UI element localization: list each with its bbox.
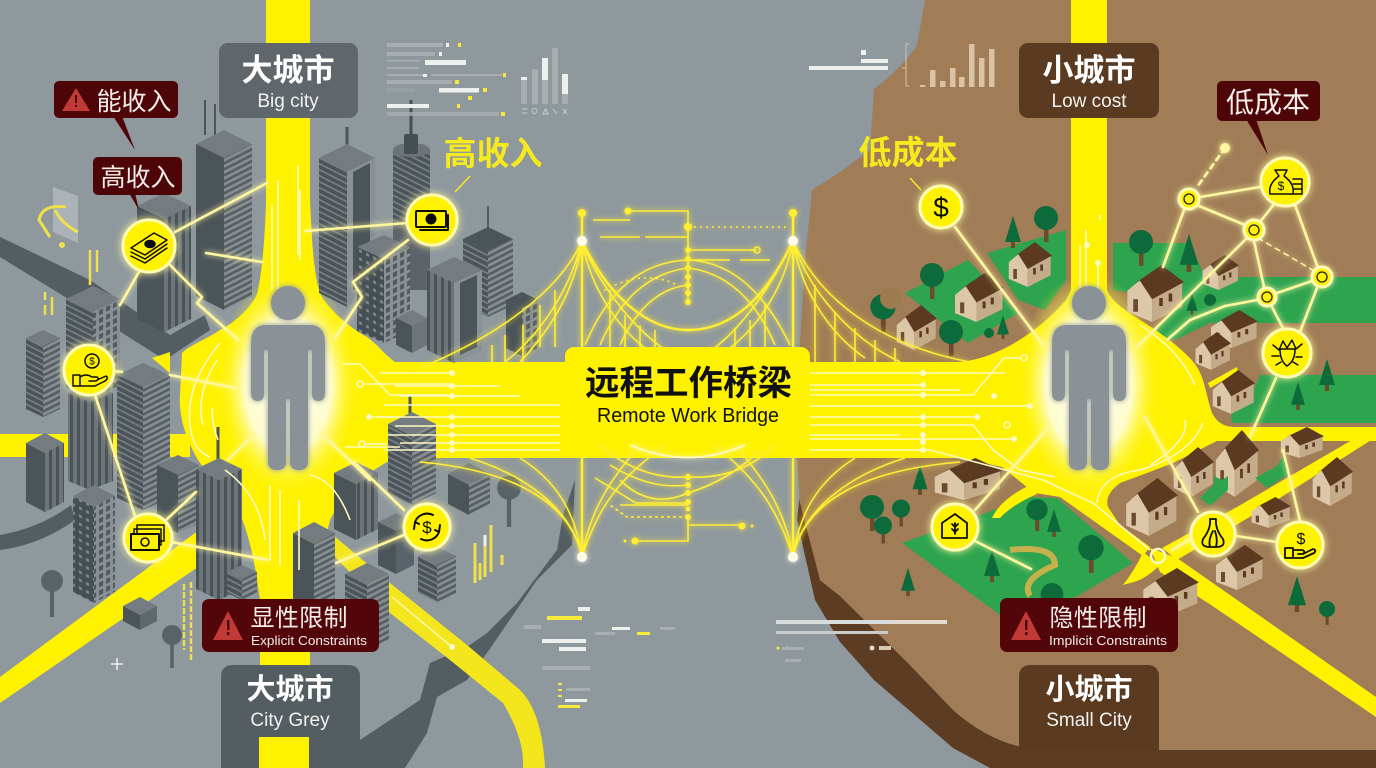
decorative device and small marks, top left <box>39 187 97 315</box>
icon: dollar cycle <box>404 504 450 550</box>
callout: 能收入 <box>54 81 178 150</box>
bridge title panel: Remote Work Bridge <box>597 405 779 427</box>
hub glow: left person <box>216 273 360 497</box>
callout: explicit constraints <box>202 599 379 652</box>
label: low cost top: 小城市 <box>1042 53 1136 88</box>
icon: hand giving dollar <box>1277 522 1323 568</box>
yellow roads and small city hub <box>960 0 1376 717</box>
data widget: top centre bars <box>809 50 888 70</box>
data widget: bottom left <box>524 607 675 708</box>
region: brown small city ground <box>795 0 1376 750</box>
icon: money stack <box>123 220 175 272</box>
label: big city top <box>219 43 358 118</box>
river: dark grey lower <box>345 480 575 768</box>
region: green fields <box>902 230 1376 615</box>
label: big city top: 大城市 <box>242 53 334 88</box>
callout: implicit constraints: 隐性限制 <box>1050 605 1146 632</box>
callout: 能收入: 能收入 <box>96 88 172 116</box>
yellow heading: 低成本 <box>858 134 958 190</box>
icon: hand giving dollar: $ <box>1297 531 1306 548</box>
region: dark brown bank <box>797 495 1376 768</box>
callout: implicit constraints: Implicit Constraints <box>1049 633 1168 648</box>
label: low cost top <box>1019 43 1159 118</box>
junction ring <box>1151 549 1165 563</box>
icon: dollar cycle: $ <box>422 518 432 537</box>
bar chart: top left <box>521 48 568 114</box>
bridge title panel <box>565 347 810 442</box>
data widget: bottom right <box>776 620 947 662</box>
grey trees <box>41 476 521 668</box>
icon: dollar sign: $ <box>933 192 949 223</box>
road centre line <box>392 597 455 650</box>
connection lines: small city <box>955 148 1318 569</box>
callout: implicit constraints <box>1000 598 1178 652</box>
bar chart: top right <box>902 44 994 87</box>
chart: bridge cables and towers <box>420 208 970 562</box>
label: big city top: Big city <box>257 91 319 112</box>
icon: money bag and coins <box>1261 158 1309 206</box>
label: big city bottom <box>221 665 360 768</box>
icon: cash notes <box>124 514 172 562</box>
icon: banknote <box>407 195 457 245</box>
river: dark grey left <box>0 237 210 550</box>
connection lines: big city <box>95 183 408 563</box>
icon: hand with coin <box>64 345 114 395</box>
yellow roads and big city hub <box>0 0 545 768</box>
label: big city bottom: 大城市 <box>246 673 334 706</box>
small yellow bars and marks, lower left <box>111 525 502 670</box>
icon: house with plant <box>932 504 978 550</box>
icon: dollar sign <box>920 186 962 228</box>
callout: explicit constraints: 显性限制 <box>250 605 348 632</box>
label: big city bottom: City Grey <box>250 710 330 731</box>
callout: 低成本 red <box>1217 81 1320 155</box>
label: small city bottom: 小城市 <box>1045 673 1133 706</box>
yellow heading: 低成本: 低成本 <box>858 134 958 171</box>
label: small city bottom <box>1019 665 1159 750</box>
small city trees <box>860 206 1335 625</box>
big city skyscrapers <box>26 100 538 650</box>
yellow heading: 高收入 <box>444 135 542 192</box>
person: small city <box>1052 286 1126 470</box>
icon: virus shield <box>1263 329 1311 377</box>
central bridge deck band <box>380 362 1010 458</box>
icon: hand with coin: $ <box>89 356 95 368</box>
circuit traces: right hub and deck <box>810 215 1203 550</box>
yellow heading: 高收入: 高收入 <box>444 135 542 172</box>
person: big city <box>251 286 325 470</box>
hub glow: right person <box>1017 273 1161 497</box>
callout: 高收入 red <box>93 157 182 210</box>
icon: money bag and coins: $ <box>1278 179 1285 193</box>
label: small city bottom: Small City <box>1046 710 1132 731</box>
winding path in park <box>1010 549 1055 596</box>
network nodes <box>1179 143 1332 306</box>
icon: garlic <box>1191 512 1235 556</box>
bridge title panel: 远程工作桥梁 <box>585 365 792 403</box>
small city houses <box>897 242 1353 616</box>
circuit traces: left hub and deck <box>189 165 560 570</box>
label: low cost top: Low cost <box>1052 91 1127 112</box>
callout: explicit constraints: Explicit Constraints <box>251 633 368 648</box>
callout: 高收入 red: 高收入 <box>100 164 176 192</box>
data widget: top left rows <box>387 43 506 116</box>
callout: 低成本 red: 低成本 <box>1226 87 1310 118</box>
